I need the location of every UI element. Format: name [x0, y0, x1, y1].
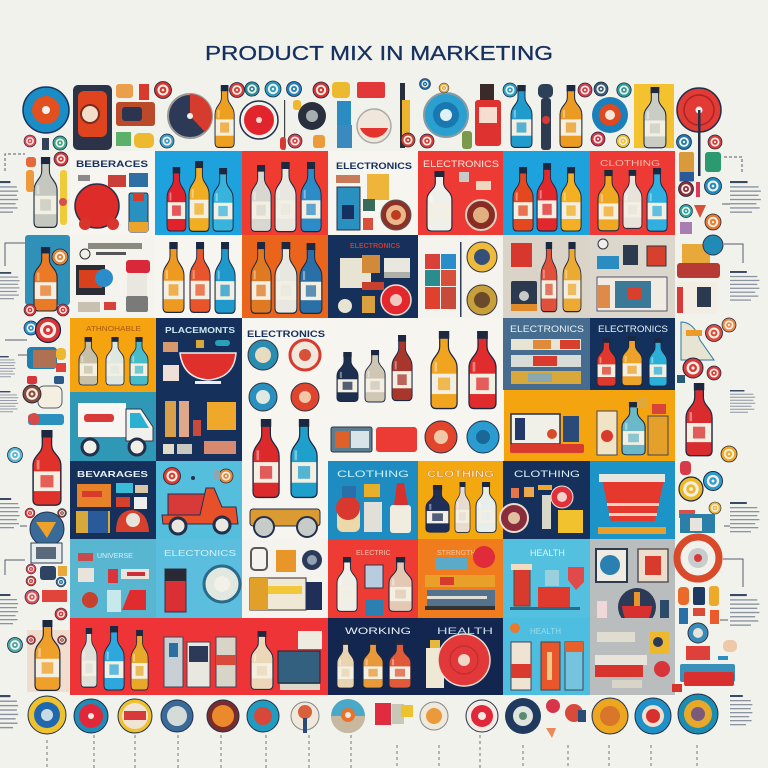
icon: framed tiles: [596, 549, 668, 582]
heading: ELECTRIC: [356, 550, 391, 557]
icon: red package: [475, 84, 501, 146]
icon: blue disc lower: [467, 421, 499, 453]
panel: placements navy: [156, 318, 242, 392]
top icon row: [23, 78, 721, 176]
bottle: yellow: [561, 167, 581, 231]
heading: CLOTHING: [514, 469, 580, 480]
icon: device stack: [336, 174, 389, 230]
bottle: orange red: [513, 167, 533, 231]
icons: left disc group: [23, 318, 66, 425]
bottle: top amber: [560, 85, 582, 147]
icon: machine: [597, 277, 667, 311]
bottle: large blue: [291, 419, 317, 497]
bottle: orange: [163, 242, 184, 312]
icon: disc 10: [466, 700, 498, 732]
heading: ELECTRONICS: [510, 324, 584, 334]
right side column: [672, 134, 737, 692]
icon: small tiles: [364, 484, 382, 532]
heading: ELECTRONICS: [598, 324, 668, 334]
icon: olive disc: [467, 285, 497, 315]
bottle: blue: [104, 626, 124, 690]
bottle: blue right: [301, 162, 321, 232]
icon: crosshair target top right: [677, 88, 721, 176]
panel: clothing navy: [500, 461, 590, 539]
panel: truck cyan: [156, 461, 242, 539]
icon: concentric blue disc: [592, 97, 628, 133]
heading: STRENGTH: [437, 550, 476, 557]
heading: WORKING: [345, 626, 411, 636]
panel: amber laptop and bottles: [504, 390, 675, 461]
panel: electronics red: [418, 151, 503, 235]
panel: orange bottles row: [70, 318, 156, 392]
icon: blue disc: [249, 383, 277, 411]
icon: red button disc: [240, 101, 278, 139]
icon: disc 4: [161, 700, 193, 732]
icon: red tile: [511, 243, 532, 267]
bottle: white red: [455, 482, 470, 532]
panel: beverages: [70, 151, 156, 235]
heading: ELECTRONICS: [350, 243, 400, 250]
icon: disc 3: [118, 699, 152, 733]
text block: left captions: [0, 181, 20, 728]
bottle: dark left: [337, 352, 358, 402]
icon: package and disc: [338, 255, 411, 315]
bottle: mixed: [131, 630, 148, 690]
bottle: yellow: [189, 161, 209, 231]
icon: red dome: [75, 173, 148, 230]
bottle: red orange: [190, 242, 210, 312]
icon: backpack package: [73, 85, 112, 150]
panel: grey tiles and dome: [590, 539, 675, 626]
icon: blue package: [129, 193, 148, 232]
icon: red panel: [165, 569, 186, 612]
left side column: [8, 135, 70, 692]
panel: large bottles: [418, 318, 503, 461]
bottle: yellow package: [637, 398, 668, 455]
panel: health cyan: [503, 539, 590, 618]
icon: left small cyan badge: [8, 448, 22, 462]
icon: teal disc: [248, 340, 278, 370]
bottle: blue: [215, 242, 235, 313]
icon: disc 13: [635, 698, 671, 734]
bottle: left orange on teal: [24, 235, 70, 316]
icon: round red pack: [336, 486, 360, 532]
bottle: cyan: [622, 402, 645, 455]
bottle: white: [337, 557, 357, 611]
bottle: white: [427, 171, 452, 231]
bottle: cyan: [130, 337, 148, 385]
icon: disc 2: [74, 699, 108, 733]
icon: dark lens disc: [284, 100, 326, 150]
bottle: cyan: [213, 168, 233, 231]
icon: left funnel dial group: [25, 508, 67, 620]
icon: blue tile: [331, 427, 372, 452]
bottle: amber: [563, 242, 581, 312]
bottle: top white on yellow: [634, 84, 674, 148]
icon: target disc top left: [23, 87, 69, 133]
icon: small tiles: [597, 239, 666, 269]
icon: red disc: [381, 200, 411, 230]
panel: grey machines: [590, 618, 675, 695]
icon: tile grid: [425, 242, 462, 317]
icon: navy dome: [597, 588, 669, 626]
icon: disc 8: [331, 699, 365, 733]
bottle: orange: [363, 640, 383, 688]
panel: books navy: [156, 392, 242, 461]
panel: machine white: [242, 539, 328, 618]
icon: cluster of small tiles: [116, 84, 155, 148]
icon: red canister: [511, 564, 532, 606]
icon: disc 5: [207, 700, 239, 732]
bottle: right red: [686, 383, 712, 456]
bottle: yellow: [622, 336, 642, 386]
bottle: pale: [106, 337, 124, 385]
bottle: white package: [426, 640, 444, 688]
bottle: yellow: [598, 170, 619, 231]
icons: left small badges: [24, 135, 68, 225]
icon: disc 14: [678, 694, 718, 734]
bottom disc row: [28, 694, 718, 738]
bottle: cyan: [647, 168, 667, 231]
icon: mixed tiles: [78, 553, 149, 612]
heading: ELECTRONICS: [423, 159, 499, 169]
panel: beige machine: [590, 235, 675, 318]
icon: machine set: [250, 548, 322, 610]
icon: small red disc: [154, 82, 172, 98]
icon: red disc: [290, 340, 320, 370]
bottle: white centre: [275, 162, 296, 232]
left captions and connectors: [0, 154, 27, 728]
icon: disc 6: [247, 700, 279, 732]
heading: PLACEMONTS: [165, 325, 235, 335]
icon: disc 1: [28, 696, 66, 734]
bottle: white: [476, 482, 496, 532]
icon: disc 12: [592, 698, 628, 734]
icons: badges right: [420, 78, 631, 149]
icon: disc 9: [420, 702, 448, 730]
bottle: white: [623, 170, 642, 228]
panel: beige bottles: [503, 235, 590, 318]
panel: bottles on red: [242, 151, 328, 235]
bottle: left red: [33, 430, 61, 505]
icon: narrow dark column: [400, 83, 415, 148]
icon: yellow cart: [250, 509, 320, 537]
icon: tile: [365, 565, 383, 616]
heading: HEALTH: [437, 626, 493, 636]
icon: delivery truck: [78, 403, 153, 455]
panel: tile grid and discs: [418, 235, 503, 318]
panel: basket blue: [590, 461, 675, 539]
bottle: cream: [251, 631, 273, 689]
icons: right column cluster: [677, 318, 736, 383]
icon: compass dial: [168, 94, 212, 138]
icon: blue and red device: [337, 101, 391, 148]
panel: orange machine: [418, 539, 503, 618]
connectors: left brackets: [5, 154, 27, 575]
panel: electronics white discs: [242, 318, 328, 461]
icon: top badges: [164, 468, 233, 484]
icon: tiles: [76, 243, 150, 312]
panel: cart white: [242, 419, 328, 539]
panel: clothing red: [590, 151, 675, 235]
icon: tiles centre: [375, 703, 413, 725]
bottle: white: [275, 242, 297, 313]
bottle: white red cap: [390, 483, 411, 533]
icon: spoon: [291, 702, 319, 733]
heading: BEBERACES: [76, 159, 148, 169]
icon: red pickup: [162, 488, 238, 534]
icon: red tile: [376, 427, 417, 452]
icon: canisters: [510, 623, 583, 690]
bottle: dark red: [392, 335, 412, 401]
panel: health navy: [418, 618, 503, 695]
icon: disc 11: [505, 698, 541, 734]
panel: beverages navy: [70, 461, 156, 539]
bottle: coral: [389, 640, 411, 688]
bottle: cyan: [649, 338, 667, 386]
panel: bottles on white: [155, 235, 242, 318]
panel grid: [70, 151, 675, 695]
bottle: red: [167, 167, 186, 231]
bottle: left orange lower: [8, 620, 69, 692]
panel: clothing amber: [418, 461, 503, 539]
panel: bottles and tiles: [328, 318, 418, 461]
icon: ring gauge: [677, 537, 719, 579]
bottle: white left: [251, 165, 271, 231]
icon: machine stack: [595, 632, 670, 688]
panel: electronics light blue: [156, 539, 242, 618]
icon: blue box: [278, 631, 322, 690]
bottle: orange: [251, 242, 271, 313]
icons: small coloured badges: [160, 81, 385, 150]
bottle: cream: [365, 350, 385, 402]
icon: red disc lower: [425, 421, 457, 453]
icon: silver disc: [204, 566, 240, 602]
panel: red bottles: [328, 539, 418, 618]
panel: light teal products: [70, 539, 156, 618]
icon: dark box: [511, 281, 537, 311]
bottle: grey: [79, 337, 98, 385]
bottle: white red: [389, 557, 412, 611]
bottle: left grey: [34, 157, 57, 227]
bottle: large amber: [431, 331, 457, 409]
bottle: red yellow: [541, 242, 557, 312]
bottle: large red: [253, 419, 279, 497]
heading: ATHNOHABLE: [86, 324, 141, 333]
heading: UNIVERSE: [97, 553, 133, 560]
heading: BEVARAGES: [77, 469, 148, 479]
panel: assorted products: [70, 235, 155, 318]
bottle: top blue: [511, 85, 532, 147]
panel: electronics white: [328, 151, 418, 235]
heading: ELECTRONICS: [336, 161, 412, 171]
icon: small red figures: [546, 699, 586, 738]
icon: discs and tiles: [500, 485, 583, 533]
bottle: top narrow dark: [538, 84, 553, 150]
icon: books and tiles: [163, 401, 236, 454]
panel: working navy: [328, 618, 418, 695]
panel: clothing blue: [328, 461, 418, 539]
panel: electronics navy: [590, 318, 675, 390]
panel: bottles on orange: [242, 235, 328, 318]
panel: red band bottles and packs: [70, 618, 328, 695]
bottle: white grey: [81, 628, 97, 687]
heading: HEALTH: [530, 627, 561, 636]
heading: CLOTHING: [337, 469, 409, 479]
icon: blue ripple disc: [424, 93, 468, 137]
bottle: large red: [469, 331, 496, 409]
bottle: navy: [426, 485, 449, 532]
icon: device and tile: [510, 567, 584, 610]
icons: mid right group: [677, 235, 723, 314]
panel: cyan canisters: [503, 618, 590, 695]
bottle: pale package: [597, 411, 617, 455]
bottle: red: [597, 338, 616, 386]
icon: layered machine: [425, 546, 495, 610]
heading: HEALTH: [530, 548, 565, 558]
heading: CLOTHING: [427, 469, 494, 480]
bottle: red: [537, 163, 557, 231]
icon: red bowl: [163, 340, 236, 384]
icon: yellow disc: [467, 242, 497, 272]
connectors: right brackets: [720, 157, 743, 620]
bottom drop lines: [47, 735, 697, 768]
icons: lower right badges: [679, 446, 737, 533]
panel: bottles on blue: [155, 151, 242, 235]
icon: book packs: [164, 637, 236, 687]
heading: ELECTONICS: [164, 548, 236, 558]
icon: red basket: [598, 474, 666, 534]
icon: red orange disc: [291, 383, 319, 411]
text block: right captions: [730, 181, 761, 725]
icon: tiles and disc: [459, 172, 496, 230]
icons: bottom right cluster: [672, 586, 737, 692]
right captions and connectors: [720, 157, 761, 725]
heading: CLOTHING: [600, 158, 660, 168]
title: PRODUCT MIX IN MARKETING: [205, 43, 553, 65]
icon: tile rows: [511, 339, 581, 384]
heading: ELECTRONICS: [247, 329, 325, 339]
icon: laptop: [510, 414, 584, 453]
bottle: top orange: [215, 85, 234, 147]
panel: bottles on blue 2: [503, 151, 590, 235]
bottle: blue: [300, 243, 322, 313]
panel: electronics slate: [503, 318, 590, 390]
icon: product tiles: [76, 483, 149, 533]
panel: navy products: [328, 235, 418, 318]
icon: large red disc: [438, 634, 490, 686]
icons: upper right badges: [676, 134, 722, 234]
bottle: cream: [337, 640, 354, 688]
panel: truck teal: [70, 392, 156, 461]
